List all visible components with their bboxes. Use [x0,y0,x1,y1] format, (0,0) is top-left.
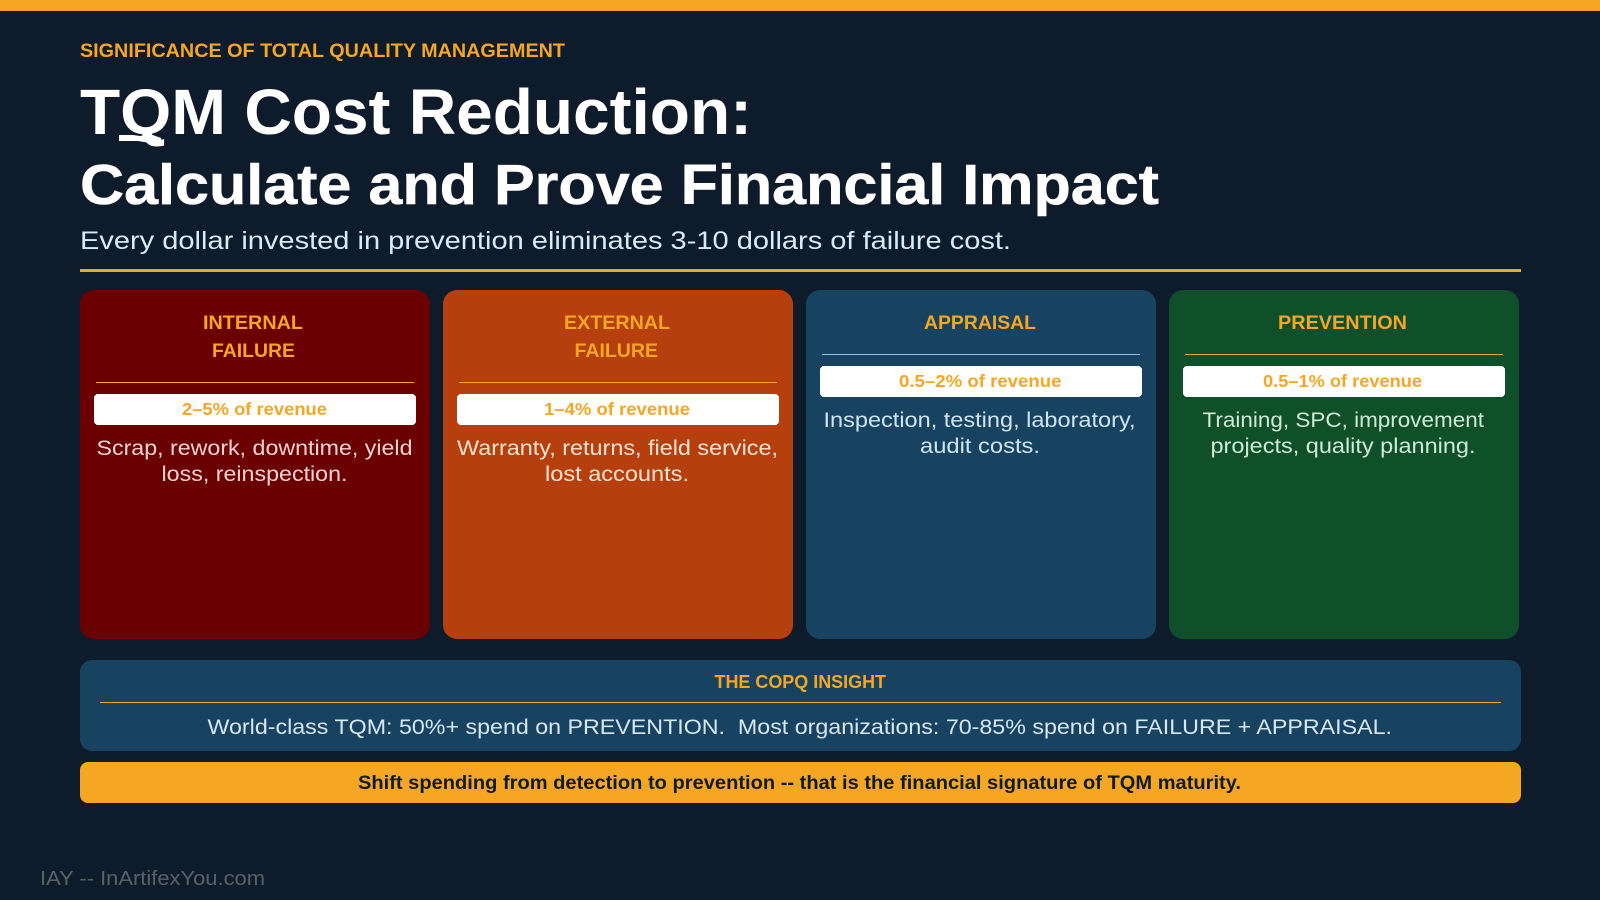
insight heading: THE COPQ INSIGHT [714,672,886,692]
description: internal failure: loss, reinspection. [162,462,348,486]
panel: prevention [1169,290,1519,639]
title [80,76,1159,217]
title: Calculate and Prove Financial Impact [80,153,1159,217]
revenue pill: 0.5–2%: 0.5–2% of revenue [899,371,1062,391]
revenue pill: 1–4%: 1–4% of revenue [544,399,690,419]
description: external failure [457,436,778,486]
top accent bar [0,0,1600,11]
description: internal failure: Scrap, rework, downtime, yield [96,436,412,460]
panel: external failure [443,290,793,639]
callout banner [80,762,1521,803]
description: prevention [1202,408,1484,458]
heading: external failure: EXTERNAL [564,312,670,334]
subtitle: Every dollar invested in prevention eliminates 3-10 dollars of failure cost. [80,227,1011,255]
panel: COPQ insight [80,660,1521,751]
heading: internal failure: INTERNAL [203,312,303,334]
callout banner: Shift spending from detection to prevention -- that is the financial signature of TQM maturity. [358,773,1241,794]
description: prevention: projects, quality planning. [1210,434,1476,458]
revenue pill: 0.5–1%: 0.5–1% of revenue [1263,371,1422,391]
heading: external failure [564,312,670,362]
heading: internal failure: FAILURE [212,340,295,362]
description: appraisal [824,408,1136,458]
revenue pill: 2–5% [94,394,416,425]
description: appraisal: audit costs. [920,434,1040,458]
revenue pill: 2–5%: 2–5% of revenue [182,399,327,419]
heading: appraisal: APPRAISAL [924,312,1036,334]
description: prevention: Training, SPC, improvement [1202,408,1484,432]
heading: external failure: FAILURE [574,340,658,362]
heading: prevention: PREVENTION [1278,312,1407,334]
heading: internal failure [203,312,303,362]
insight text: World-class TQM: 50%+ spend on PREVENTION. Most organizations: 70-85% spend on FAILURE + APPRAISAL. [208,715,1392,739]
description: appraisal: Inspection, testing, laboratory, [824,408,1136,432]
title: TQM Cost Reduction: [80,76,752,148]
kicker: SIGNIFICANCE OF TOTAL QUALITY MANAGEMENT [80,40,565,62]
panel: internal failure [80,290,430,639]
revenue pill: 0.5–2% [820,366,1142,397]
description: external failure: Warranty, returns, field service, [457,436,778,460]
panel: appraisal [806,290,1156,639]
header rule [80,269,1521,272]
description: internal failure [96,436,412,486]
revenue pill: 0.5–1% [1183,366,1505,397]
footer: IAY -- InArtifexYou.com [40,868,265,890]
revenue pill: 1–4% [457,394,779,425]
description: external failure: lost accounts. [545,462,689,486]
